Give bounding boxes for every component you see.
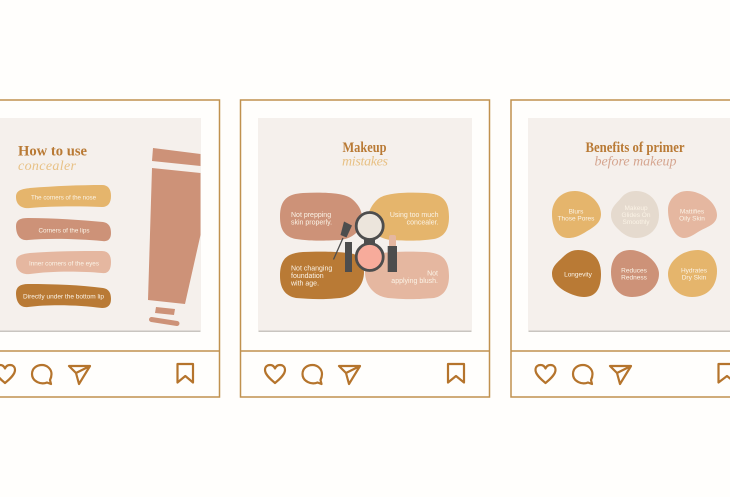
icon: send — [610, 366, 631, 384]
icon: bookmark — [448, 364, 464, 382]
icon: send — [69, 366, 90, 384]
card background — [258, 118, 472, 332]
brush label: directly under the bottom lip — [16, 284, 111, 308]
lipstick — [388, 235, 397, 272]
blob: reduces redness: Reduces — [621, 268, 648, 274]
icon: comment — [302, 365, 322, 384]
illustration: concealer tube — [148, 148, 200, 324]
compact hinge — [364, 240, 375, 244]
blob: makeup glides on smoothly: Smoothly — [622, 219, 650, 226]
blob: using too much concealer: Using too much — [390, 212, 439, 219]
blob: makeup glides on smoothly: Makeup — [624, 205, 648, 212]
blob: not changing foundation with age: Not changing — [291, 266, 332, 272]
icon: heart — [0, 365, 15, 383]
post frame — [0, 100, 220, 397]
card background — [0, 118, 201, 332]
heading: makeup: Makeup — [342, 140, 386, 156]
blob: makeup glides on smoothly: Glides On — [622, 212, 651, 219]
icon: bookmark — [718, 364, 730, 382]
panel: how to use concealer post — [0, 100, 220, 397]
blob: longevity: Longevity — [564, 272, 593, 278]
blob: not applying blush: Not — [427, 270, 438, 278]
icon: comment — [573, 365, 592, 384]
blob: not changing foundation with age: foundation — [291, 273, 324, 280]
icon: heart — [536, 365, 556, 383]
blob: mattifies oily skin: Mattifies — [680, 208, 705, 216]
blob: longevity — [552, 250, 601, 297]
heading: benefits of primer: Benefits of primer — [586, 140, 685, 156]
blob: hydrates dry skin: Dry Skin — [682, 274, 707, 282]
blob: blurs those pores: Those Pores — [558, 216, 595, 222]
blob: not applying blush: applying blush. — [391, 278, 438, 285]
blob: not prepping skin properly: skin properly. — [291, 220, 332, 226]
blob: reduces redness: Redness — [621, 274, 648, 282]
icon: send — [339, 366, 360, 384]
brush label: corners of the nose — [16, 185, 111, 208]
card background — [528, 118, 730, 332]
blob: hydrates dry skin — [668, 250, 717, 297]
blob: not changing foundation with age: with age. — [290, 280, 319, 287]
blob: not applying blush — [365, 252, 449, 299]
blob: using too much concealer: concealer. — [407, 220, 439, 226]
blob: blurs those pores — [552, 191, 601, 238]
script heading: mistakes: mistakes — [342, 154, 389, 170]
blob: not changing foundation with age — [280, 252, 364, 299]
illustration: makeup set — [334, 212, 397, 272]
brush label: corners of the nose: The corners of the nose — [31, 194, 97, 202]
brush label: inner corners of the eyes — [16, 251, 111, 274]
blob: not prepping skin properly — [280, 193, 362, 241]
brush label: directly under the bottom lip: Directly under the bottom lip — [23, 294, 105, 300]
panel: benefits of primer post — [511, 100, 730, 397]
heading: how to use: How to use — [18, 144, 87, 160]
post frame — [240, 100, 490, 397]
blob: using too much concealer — [368, 193, 449, 241]
blob: not prepping skin properly: Not prepping — [291, 212, 331, 219]
blob: reduces redness — [611, 250, 659, 297]
icon: bookmark — [178, 364, 193, 382]
icon: comment — [32, 365, 52, 384]
post frame — [511, 100, 730, 397]
blob: mattifies oily skin — [668, 191, 717, 238]
compact: blush — [356, 244, 383, 270]
compact: powder — [356, 212, 383, 240]
script heading: before makeup: before makeup — [594, 154, 676, 170]
blob: makeup glides on smoothly — [611, 191, 659, 238]
icon: heart — [265, 365, 285, 383]
blob: hydrates dry skin: Hydrates — [681, 268, 708, 274]
panel: makeup mistakes post — [240, 100, 490, 397]
brush label: corners of the lips — [16, 218, 111, 241]
brush label: inner corners of the eyes: Inner corners of the eyes — [29, 260, 99, 268]
divider — [240, 350, 490, 352]
blob: mattifies oily skin: Oily Skin — [679, 216, 705, 222]
script heading: concealer: concealer — [18, 159, 77, 174]
mascara — [334, 222, 352, 272]
brush label: corners of the lips: Corners of the lips — [38, 228, 90, 234]
blob: blurs those pores: Blurs — [569, 208, 584, 216]
